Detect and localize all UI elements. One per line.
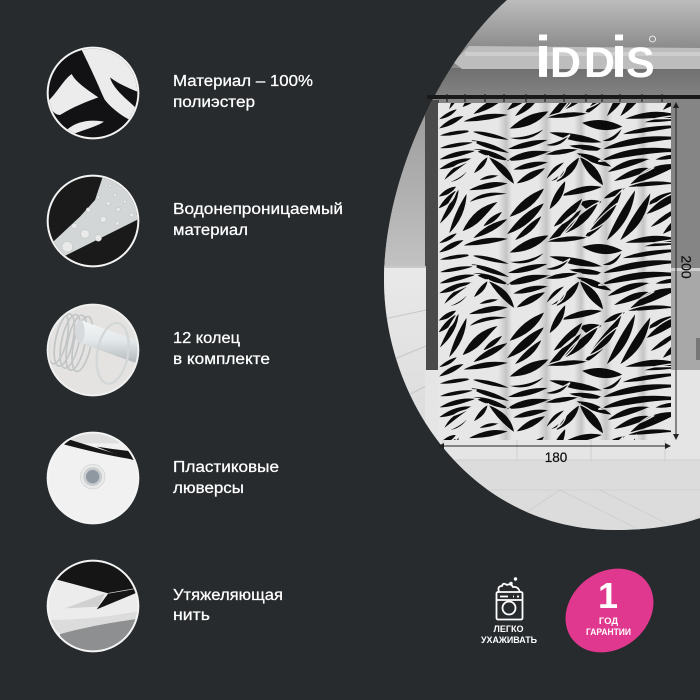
feature 5: weighted hem photo (46, 560, 140, 652)
feature 2: waterproof photo (46, 174, 140, 268)
care label (481, 624, 537, 646)
feature 5: text: Утяжеляющая (173, 587, 283, 604)
dimension: height 200: 200 (678, 255, 694, 279)
curtain rod (427, 95, 700, 99)
feature 3: text: 12 колец (173, 330, 240, 347)
feature 4: eyelet photo (46, 432, 140, 524)
feature 3: text: в комплекте (173, 351, 270, 368)
dimension: height 200 (673, 102, 694, 440)
feature 2: text: Водонепроницаемый (173, 201, 343, 218)
feature 4: text (173, 459, 279, 497)
curtain rings (447, 94, 662, 102)
care label: ЛЕГКО (494, 624, 524, 635)
feature 5: text: нить (173, 607, 210, 624)
feature 3: rings photo (46, 304, 140, 396)
icon: washing machine (496, 578, 522, 620)
feature 4: text: люверсы (173, 480, 244, 497)
dimension: width 180: 180 (545, 450, 567, 465)
curtain folds (498, 103, 648, 440)
feature 3: text (173, 330, 270, 368)
feature 1: text (173, 73, 313, 111)
dimension: width 180 (438, 443, 671, 465)
feature 5: text (173, 587, 283, 624)
zebra curtain (438, 103, 671, 440)
bathroom photo (380, 0, 700, 530)
warranty badge (549, 551, 670, 670)
warranty badge: ГОД (599, 616, 618, 627)
feature 1: text: Материал – 100% (173, 73, 313, 90)
feature 2: text: материал (173, 222, 248, 239)
warranty badge: ГАРАНТИИ (586, 627, 631, 638)
logo: iDDiS (535, 25, 655, 90)
warranty badge: 1 (598, 575, 618, 616)
care label: УХАЖИВАТЬ (481, 635, 537, 646)
feature 4: text: Пластиковые (173, 459, 279, 476)
feature 1: text: полиэстер (173, 94, 255, 111)
feature 2: text (173, 201, 343, 239)
feature 1: material photo (46, 46, 140, 140)
